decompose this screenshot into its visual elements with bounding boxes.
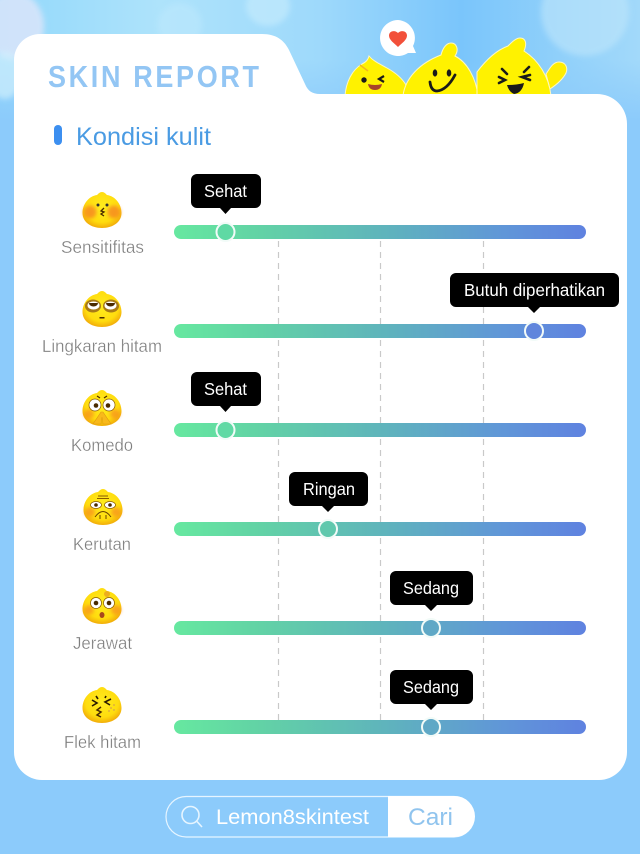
mascot: right lemon laughing: [477, 38, 567, 96]
lemon mascots: [345, 38, 567, 96]
tooltip: Sedang: [390, 670, 473, 710]
search text: Lemon8skintest: [216, 806, 369, 829]
icon: tired lemon: [82, 291, 122, 327]
heading: skin condition: Kondisi kulit: [76, 123, 211, 151]
row: Jerawat: [73, 571, 586, 653]
tooltip: Sehat: [191, 372, 261, 412]
slider track: [174, 225, 586, 239]
label: Jerawat: [73, 633, 132, 653]
tooltip: Sedang: [390, 571, 473, 611]
slider track: [174, 423, 586, 437]
slider track: [174, 522, 586, 536]
label: Flek hitam: [64, 732, 141, 752]
tooltip: Sehat: Sehat: [204, 379, 247, 399]
slider track: [174, 621, 586, 635]
tooltip: Sedang: Sedang: [403, 578, 459, 598]
title: SKIN REPORT: [48, 61, 259, 94]
tooltip: Sehat: [191, 174, 261, 214]
icon: blushing kissing lemon: [82, 192, 122, 228]
button label: Cari: [408, 804, 453, 831]
label: Kerutan: [73, 534, 131, 554]
mascot: left lemon winking: [345, 56, 406, 96]
slider track: [174, 324, 586, 338]
search bar: [166, 796, 475, 837]
icon: wrinkled lemon: [84, 489, 122, 525]
tooltip: Butuh diperhatikan: Butuh diperhatikan: [464, 280, 605, 300]
label: Sensitifitas: [61, 237, 144, 257]
slider thumb: [422, 619, 440, 637]
tooltip: Ringan: Ringan: [303, 479, 355, 499]
search button: [388, 796, 475, 837]
slider thumb: [422, 718, 440, 736]
label: Komedo: [71, 435, 133, 455]
tooltip: Butuh diperhatikan: [450, 273, 619, 313]
tooltip: Sedang: Sedang: [403, 677, 459, 697]
row: Lingkaran hitam: [42, 273, 619, 356]
label: Lingkaran hitam: [42, 336, 162, 356]
row: Sensitifitas: [61, 174, 586, 257]
icon: heart speech bubble: [380, 20, 416, 56]
icon: squinting freckled lemon: [82, 687, 122, 723]
slider thumb: [525, 322, 543, 340]
icon: surprised lemon: [82, 588, 122, 624]
slider thumb: [216, 223, 234, 241]
mascot: middle lemon smiling: [403, 43, 478, 96]
grid lines: [278, 241, 484, 720]
slider track: [174, 720, 586, 734]
icon: wide-eyed lemon with hands: [82, 390, 122, 426]
row: Flek hitam: [64, 670, 586, 752]
row: Kerutan: [73, 472, 586, 554]
row: Komedo: [71, 372, 586, 455]
tooltip: Ringan: [289, 472, 368, 512]
icon: magnifier: [182, 806, 202, 827]
tooltip: Sehat: Sehat: [204, 181, 247, 201]
slider thumb: [216, 421, 234, 439]
slider thumb: [319, 520, 337, 538]
